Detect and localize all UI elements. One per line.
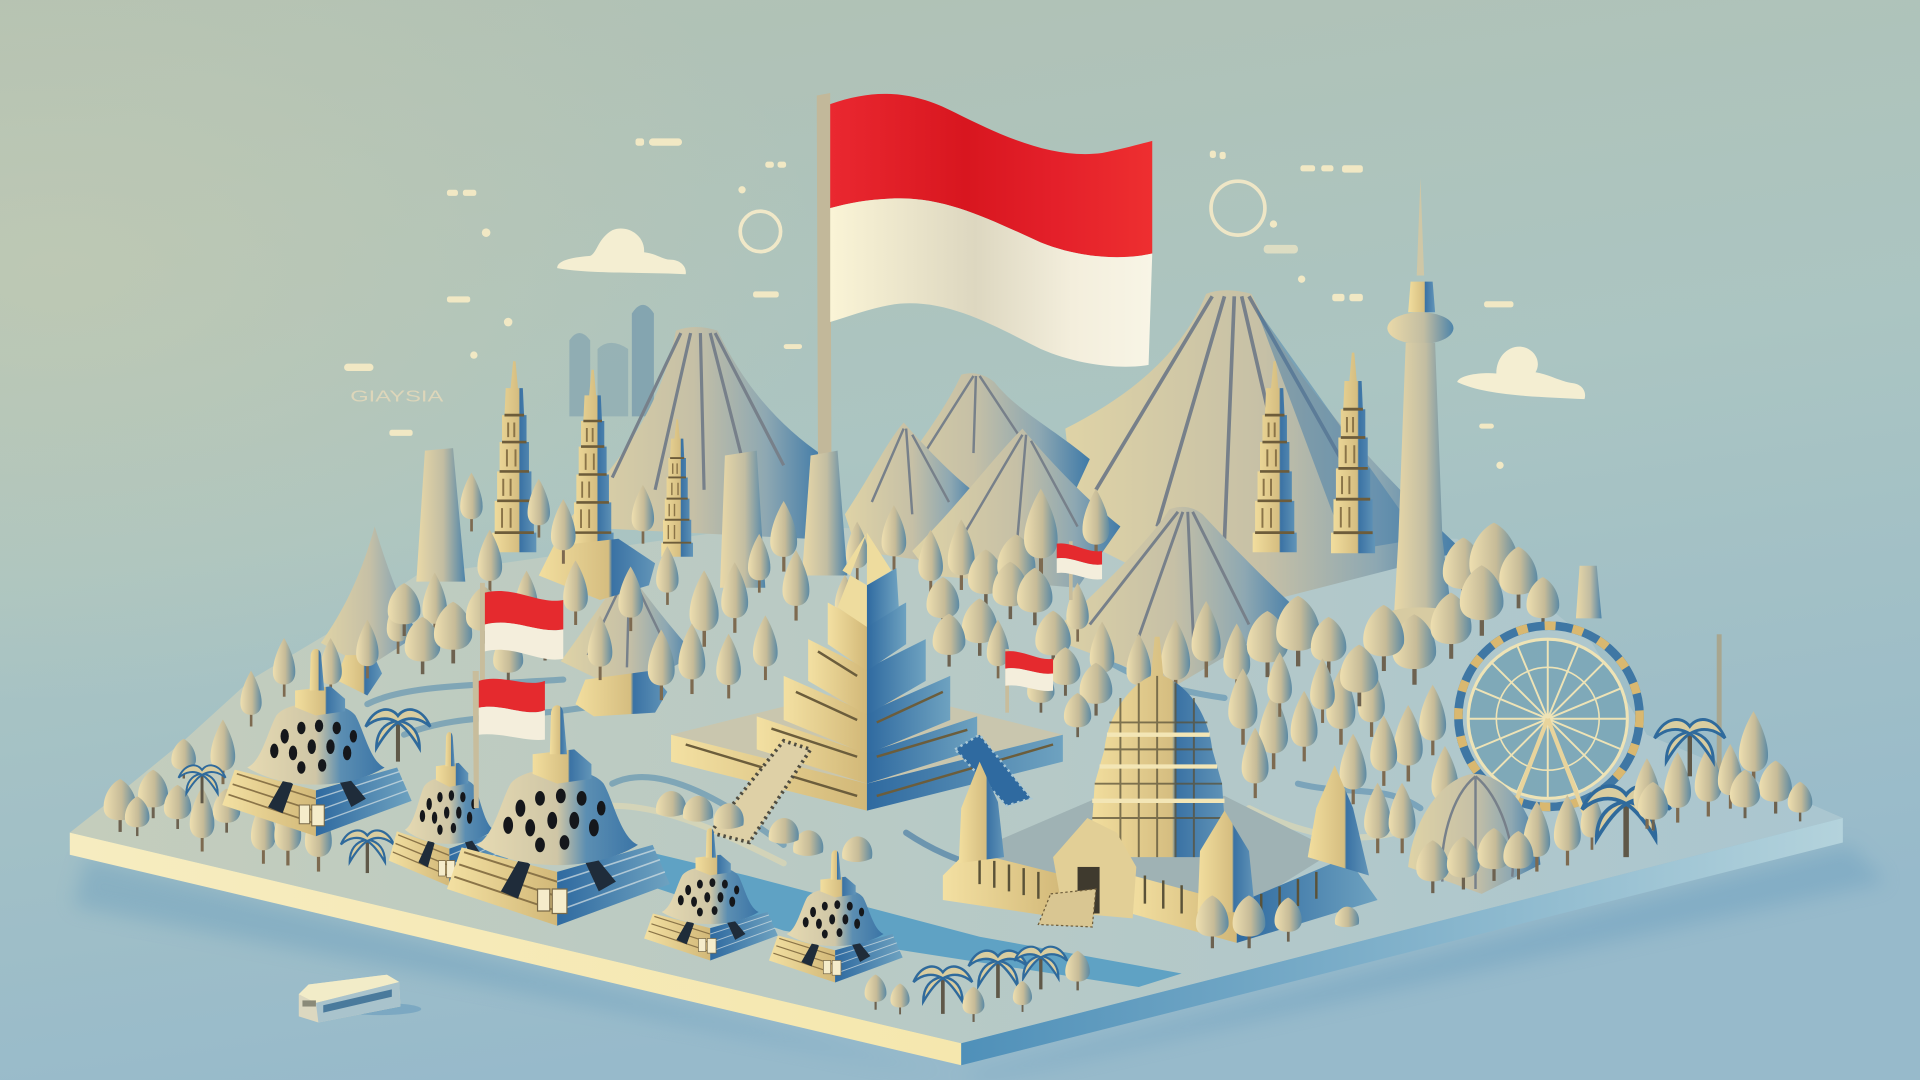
ferris wheel [1458,626,1640,820]
central temple [656,533,1063,862]
ground shading [367,637,1420,894]
mountain: mid left [561,569,696,692]
small flag left lower [473,671,545,808]
mountain: center lower [912,429,1120,588]
right shrine [1308,765,1369,876]
icon: cloud left [557,228,686,274]
stupa: front small 1 [644,828,778,960]
grove: back left [273,473,868,700]
small flag right [1005,649,1053,713]
mountains [321,290,1463,692]
label text: GIAYSIA [350,389,444,406]
platform right edge [961,818,1843,1065]
temple stripes [686,651,1053,796]
flagpole [817,93,831,456]
left building cluster [336,539,667,716]
platform top surface [70,527,1843,1043]
left tower 1 [492,361,536,552]
left tower 2 [572,370,614,551]
palace doorway [1078,867,1100,913]
front right grove [1196,711,1812,948]
stupa: small middle [389,732,511,886]
icon: ring right [1211,181,1265,235]
small monument right [1576,566,1602,618]
dome [1090,637,1227,857]
floating dashes and dots [344,138,1513,469]
platform left edge [70,833,961,1065]
right pagoda 1 [1253,361,1297,552]
small flag left upper [480,583,563,686]
canal water [655,853,1182,987]
domed palace [943,637,1378,943]
temple spire [838,533,899,627]
rocks by temple [656,791,872,862]
stupa: front large [447,705,670,926]
temple base [671,686,1063,811]
left tower 3 [661,419,693,557]
stupa: front small 2 [769,850,903,983]
mountain: far left [321,527,419,667]
block tower by pole [802,451,847,576]
icon: ring left [740,211,781,252]
palm grove [865,947,1090,1022]
slim mast right [1717,634,1722,775]
small flag centre [1057,541,1102,600]
block tower center left [720,451,765,588]
small dome pavilion [1408,774,1540,894]
main flag [817,93,1152,456]
left front grove [104,671,430,873]
back skyline buildings [569,305,654,416]
temple stairs right [955,735,1031,806]
mountain: front [1047,507,1300,686]
flag red band [830,94,1152,257]
palace back court [973,796,1335,912]
towers and pagodas [416,178,1722,775]
palace left wing [943,851,1065,918]
temple tier 5 [828,602,906,671]
bus [299,975,421,1022]
observation tower [1381,178,1460,629]
flag white band [830,198,1152,367]
palace stairs [1038,889,1096,927]
temple tier 3 [784,676,950,754]
mountain: center [857,373,1090,539]
palace gatehouse [1053,818,1136,918]
right pagoda 2 [1331,353,1375,553]
palace colonnades [980,857,1316,921]
grove: mid right [1161,523,1559,816]
tree groves [273,473,1559,816]
mountain: center small [845,422,980,563]
mountain: left [563,327,823,539]
temple tier 4 [808,639,926,715]
block tower far left [416,448,465,582]
mountain: big right [1065,290,1463,612]
panel: platform base [70,527,1886,1080]
stupa: back left [222,649,412,836]
temple tier 2 [757,716,977,784]
palace right wing side [1237,857,1378,943]
palace right wing front [1127,876,1237,943]
icon: cloud right [1457,347,1585,399]
mid shrine [1198,811,1255,912]
left shrine [959,762,1004,863]
temple stairs left [710,741,811,842]
grove: center back [882,489,1151,737]
